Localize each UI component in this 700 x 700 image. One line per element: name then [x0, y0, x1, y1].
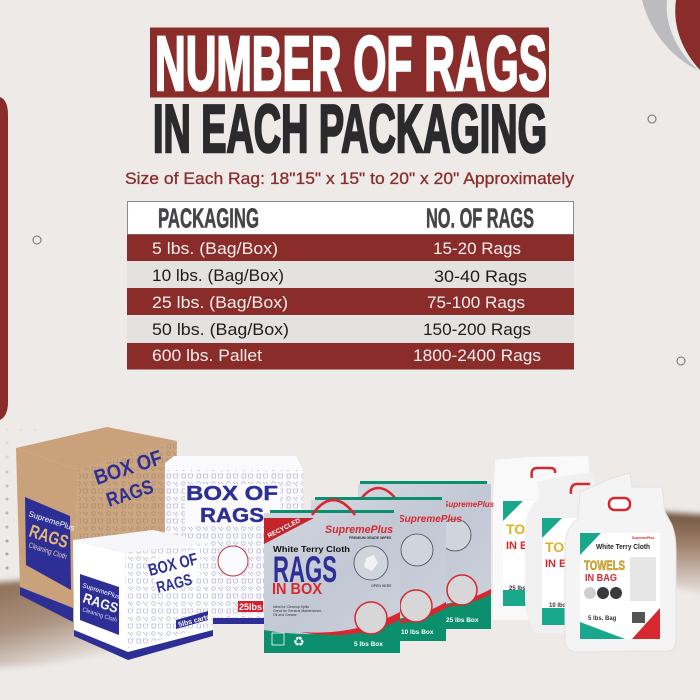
rags in box 5 lbs front: Oil and Grease [273, 613, 297, 617]
bag handle [532, 468, 555, 478]
rags in box 5 lbs front: 5 lbs Box [354, 641, 383, 648]
recycled ribbon [264, 517, 314, 544]
bag label [580, 533, 660, 639]
rags in box 5 lbs front: SupremePlus [325, 524, 393, 536]
bag handle [609, 498, 630, 510]
kraft box of rags: BOX OF [91, 446, 165, 490]
bag label: TOWELS [584, 558, 625, 573]
white 25 lbs box of rags: BOX OF [186, 483, 278, 505]
row 10 lbs: 30-40 Rags [434, 268, 527, 286]
rags in box 5 lbs front [264, 500, 400, 653]
row 25 lbs [127, 288, 574, 315]
row 600 lbs pallet [127, 343, 574, 370]
row 5 lbs [127, 234, 574, 261]
small box blue label [80, 574, 121, 635]
white terry bag 25 lbs: 25 lbs. Bag [509, 586, 541, 592]
small white 5 lbs box of rags: BOX OF [146, 549, 199, 580]
row 600 lbs pallet: 600 lbs. Pallet [152, 347, 262, 365]
top right swoosh [642, 0, 700, 72]
kraft box of rags [16, 427, 177, 622]
row 600 lbs pallet: 1800-2400 Rags [413, 347, 541, 365]
rags in box 5 lbs front: Ideal for Cleanup Spills [273, 605, 309, 609]
white 25 lbs box of rags: 25lbs [239, 602, 262, 612]
row 5 lbs: 5 lbs. (Bag/Box) [152, 240, 278, 258]
row 50 lbs: 50 lbs. (Bag/Box) [152, 321, 289, 339]
white terry bag 10 lbs: TOWELS [545, 539, 605, 555]
ring marker top right [648, 115, 656, 123]
rags in box 25 lbs [358, 481, 495, 629]
wood table right [660, 512, 700, 595]
rags in box 5 lbs front: OPEN HERE [371, 584, 392, 588]
white terry bag 25 lbs: TOWELS [506, 521, 566, 537]
row 10 lbs [127, 261, 574, 288]
rags in box 10 lbs: 10 lbs Box [401, 629, 434, 636]
small white 5 lbs box of rags: RAGS [155, 572, 194, 597]
rags in box 5 lbs front: White Terry Cloth [273, 545, 350, 554]
row 50 lbs [127, 315, 574, 343]
row 25 lbs: 25 lbs. (Bag/Box) [152, 294, 288, 312]
white terry bag 25 lbs: IN BAG [506, 540, 544, 552]
rags in box 5 lbs front: ♻ [293, 634, 305, 649]
kraft box blue label: Cleaning Cloth [27, 540, 68, 561]
bag label: 5 lbs. Bag [588, 616, 617, 622]
recycled ribbon: RECYCLED [267, 517, 302, 540]
kraft box of rags: RAGS [104, 476, 156, 512]
dotted decoration [6, 428, 36, 570]
row 50 lbs: 150-200 Rags [423, 321, 531, 339]
small white 5 lbs box of rags [73, 530, 216, 660]
ring marker right [677, 357, 685, 365]
table header: PACKAGING [158, 202, 259, 234]
small white 5 lbs box of rags: 5lbs carton [178, 613, 216, 629]
rags in box 5 lbs front: RAGS [273, 549, 337, 590]
row 10 lbs: 10 lbs. (Bag/Box) [152, 267, 284, 285]
left red side panel [0, 97, 8, 420]
kraft box blue label: SupremePlus [27, 509, 76, 533]
rags in box 25 lbs: 25 lbs Box [446, 617, 479, 624]
bag label: White Terry Cloth [596, 542, 650, 551]
packaging table [127, 202, 574, 370]
small box blue label: Cleaning Cloth [81, 607, 117, 624]
wood table left [0, 578, 130, 668]
white 25 lbs box of rags: RAGS [200, 505, 264, 527]
title band [150, 21, 549, 107]
white terry bag 10 lbs [525, 472, 630, 633]
rags in box 5 lbs front: IN BOX [272, 581, 322, 598]
kraft box blue label: RAGS [27, 521, 71, 552]
white terry bag 10 lbs: 10 lbs. Bag [549, 603, 581, 609]
rags in box 5 lbs front: PREMIUM GRADE WIPES [349, 536, 392, 540]
row 5 lbs: 15-20 Rags [433, 240, 521, 258]
white terry bag 5 lbs [565, 473, 676, 652]
rags in box 5 lbs front: Great for General Maintenance, [273, 609, 322, 613]
rags in box 10 lbs: SupremePlus [398, 514, 462, 525]
bag label: IN BAG [585, 573, 617, 584]
kraft box blue label [25, 497, 76, 590]
table header: NO. OF RAGS [426, 202, 534, 234]
small box blue label: RAGS [81, 590, 120, 616]
white terry bag 25 lbs [493, 456, 590, 620]
white 25 lbs box of rags [165, 456, 303, 624]
subtitle: Size of Each Rag: 18"15" x 15" to 20" x 20" Approximately [125, 169, 575, 188]
white terry bag 10 lbs: IN BAG [545, 558, 584, 570]
bag label: SupremePlus [632, 536, 654, 540]
row 25 lbs: 75-100 Rags [427, 294, 525, 312]
rags in box 10 lbs [311, 497, 462, 641]
small box blue label: SupremePlus [81, 582, 121, 601]
rags in box 25 lbs: SupremePlus [443, 500, 495, 509]
table header [128, 202, 574, 234]
ring marker left [33, 236, 41, 244]
